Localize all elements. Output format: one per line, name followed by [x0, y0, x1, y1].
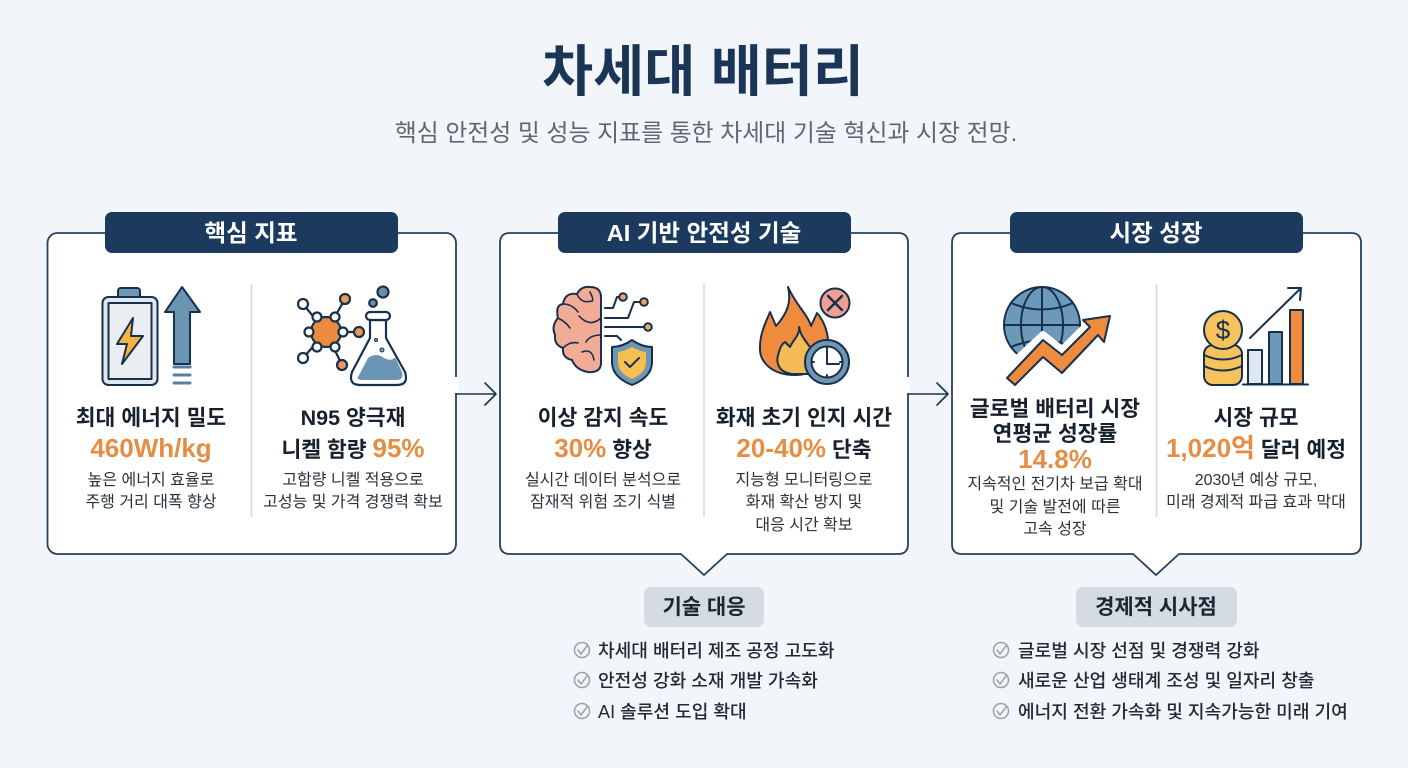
- metric: detection speed: 실시간 데이터 분석으로: [525, 471, 681, 489]
- panel header: AI 기반 안전성 기술: [607, 220, 801, 246]
- metric: CAGR: 14.8%: [1018, 444, 1092, 474]
- section badge: 경제적 시사점: [1095, 596, 1217, 619]
- metric: fire detection time: 화재 확산 방지 및: [746, 493, 862, 511]
- metric: nickel content: [263, 406, 443, 511]
- panel header: 시장 성장: [1109, 220, 1203, 246]
- panel: 시장 성장: [952, 212, 1361, 575]
- metric: detection speed: [525, 406, 681, 511]
- metric: CAGR: 연평균 성장률: [993, 422, 1117, 446]
- checklist item: 새로운 산업 생태계 조성 및 일자리 창출: [1018, 671, 1315, 691]
- metric: energy density: [76, 406, 226, 511]
- section badge: 기술 대응: [662, 596, 746, 619]
- metric: nickel content: N95 양극재: [301, 406, 405, 430]
- arrow: panel 1 to panel 2: [456, 383, 496, 405]
- panel header: 핵심 지표: [204, 220, 298, 246]
- metric: CAGR: 지속적인 전기차 보급 확대: [967, 475, 1143, 493]
- icon: battery with up arrow: [102, 287, 200, 385]
- section: 기술 대응: [574, 587, 835, 722]
- metric: detection speed: 잠재적 위험 조기 식별: [530, 493, 676, 511]
- checklist item: 에너지 전환 가속화 및 지속가능한 미래 기여: [1018, 702, 1348, 722]
- metric: CAGR: [967, 397, 1143, 538]
- metric: energy density: 높은 에너지 효율로: [88, 471, 214, 489]
- metric: fire detection time: 지능형 모니터링으로: [736, 471, 872, 489]
- metric: detection speed: 30% 향상: [554, 433, 652, 463]
- section badge: [1076, 587, 1237, 627]
- panel header: [1010, 212, 1303, 253]
- icon: fire and clock: [760, 287, 850, 384]
- metric: energy density: 460Wh/kg: [90, 433, 212, 463]
- section: 경제적 시사점: [994, 587, 1348, 722]
- metric: energy density: 최대 에너지 밀도: [76, 406, 226, 430]
- metric: market size: 미래 경제적 파급 효과 막대: [1166, 493, 1346, 511]
- icon: globe with rising arrow: [1002, 287, 1110, 385]
- metric: detection speed: 이상 감지 속도: [538, 406, 668, 430]
- section badge: [644, 587, 764, 627]
- arrow: panel 2 to panel 3: [908, 383, 948, 405]
- metric: fire detection time: 화재 초기 인지 시간: [716, 406, 892, 430]
- metric: nickel content: 니켈 함량 95%: [281, 433, 425, 463]
- title: 차세대 배터리: [542, 41, 864, 103]
- metric: CAGR: 및 기술 발전에 따른: [989, 498, 1121, 516]
- metric: fire detection time: 20-40% 단축: [736, 433, 872, 463]
- metric: market size: 1,020억 달러 예정: [1166, 433, 1346, 463]
- metric: market size: [1166, 406, 1346, 511]
- icon: brain with shield: [554, 287, 652, 385]
- panel: 핵심 지표: [48, 212, 458, 554]
- metric: nickel content: 고성능 및 가격 경쟁력 확보: [263, 493, 443, 511]
- metric: market size: 2030년 예상 규모,: [1195, 471, 1317, 489]
- metric: CAGR: 글로벌 배터리 시장: [970, 397, 1140, 421]
- subtitle: 핵심 안전성 및 성능 지표를 통한 차세대 기술 혁신과 시장 전망.: [395, 120, 1017, 147]
- metric: nickel content: 고함량 니켈 적용으로: [282, 471, 424, 489]
- icon: coins and bar chart: $: [1216, 315, 1231, 345]
- icon: molecule and flask: [298, 286, 406, 385]
- checklist item: 안전성 강화 소재 개발 가속화: [598, 671, 818, 691]
- metric: CAGR: 고속 성장: [1023, 520, 1087, 538]
- icon: coins and bar chart: [1204, 288, 1308, 385]
- panel header: [558, 212, 851, 253]
- checklist item: 글로벌 시장 선점 및 경쟁력 강화: [1018, 641, 1260, 661]
- panel: AI 기반 안전성 기술: [500, 212, 910, 575]
- metric: market size: 시장 규모: [1213, 406, 1299, 430]
- metric: fire detection time: 대응 시간 확보: [755, 516, 853, 534]
- checklist item: 차세대 배터리 제조 공정 고도화: [598, 641, 835, 661]
- metric: energy density: 주행 거리 대폭 향상: [85, 493, 217, 511]
- checklist item: AI 솔루션 도입 확대: [598, 702, 747, 722]
- panel header: [105, 212, 398, 253]
- metric: fire detection time: [716, 406, 892, 534]
